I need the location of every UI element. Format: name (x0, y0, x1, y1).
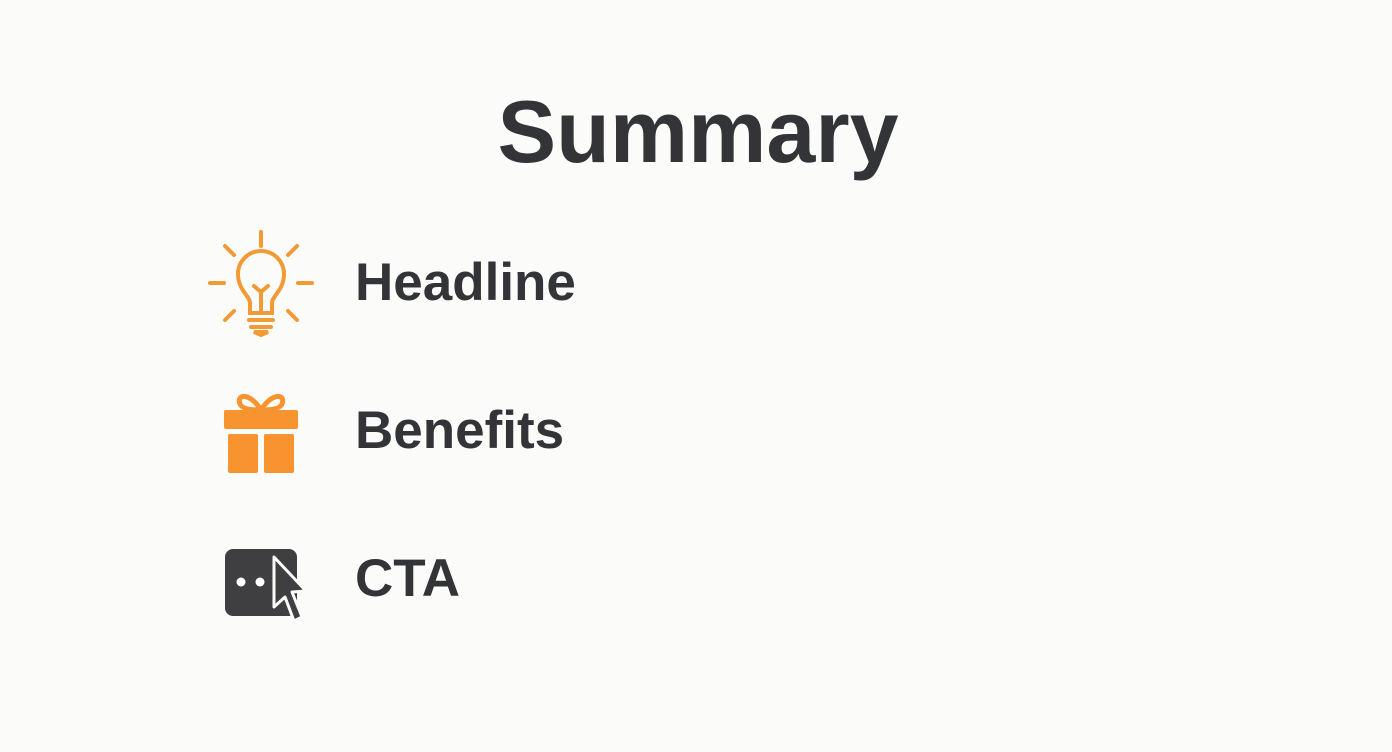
item: benefits (224, 396, 564, 473)
item: cta (225, 549, 460, 621)
item: headline (210, 232, 576, 335)
label: benefits: Benefits (355, 401, 564, 460)
label: cta: CTA (355, 549, 460, 608)
icon: gift (224, 396, 298, 473)
icon: light bulb (210, 232, 312, 335)
title: Summary (497, 82, 899, 181)
label: headline: Headline (355, 253, 576, 312)
icon: button with cursor (225, 549, 306, 621)
